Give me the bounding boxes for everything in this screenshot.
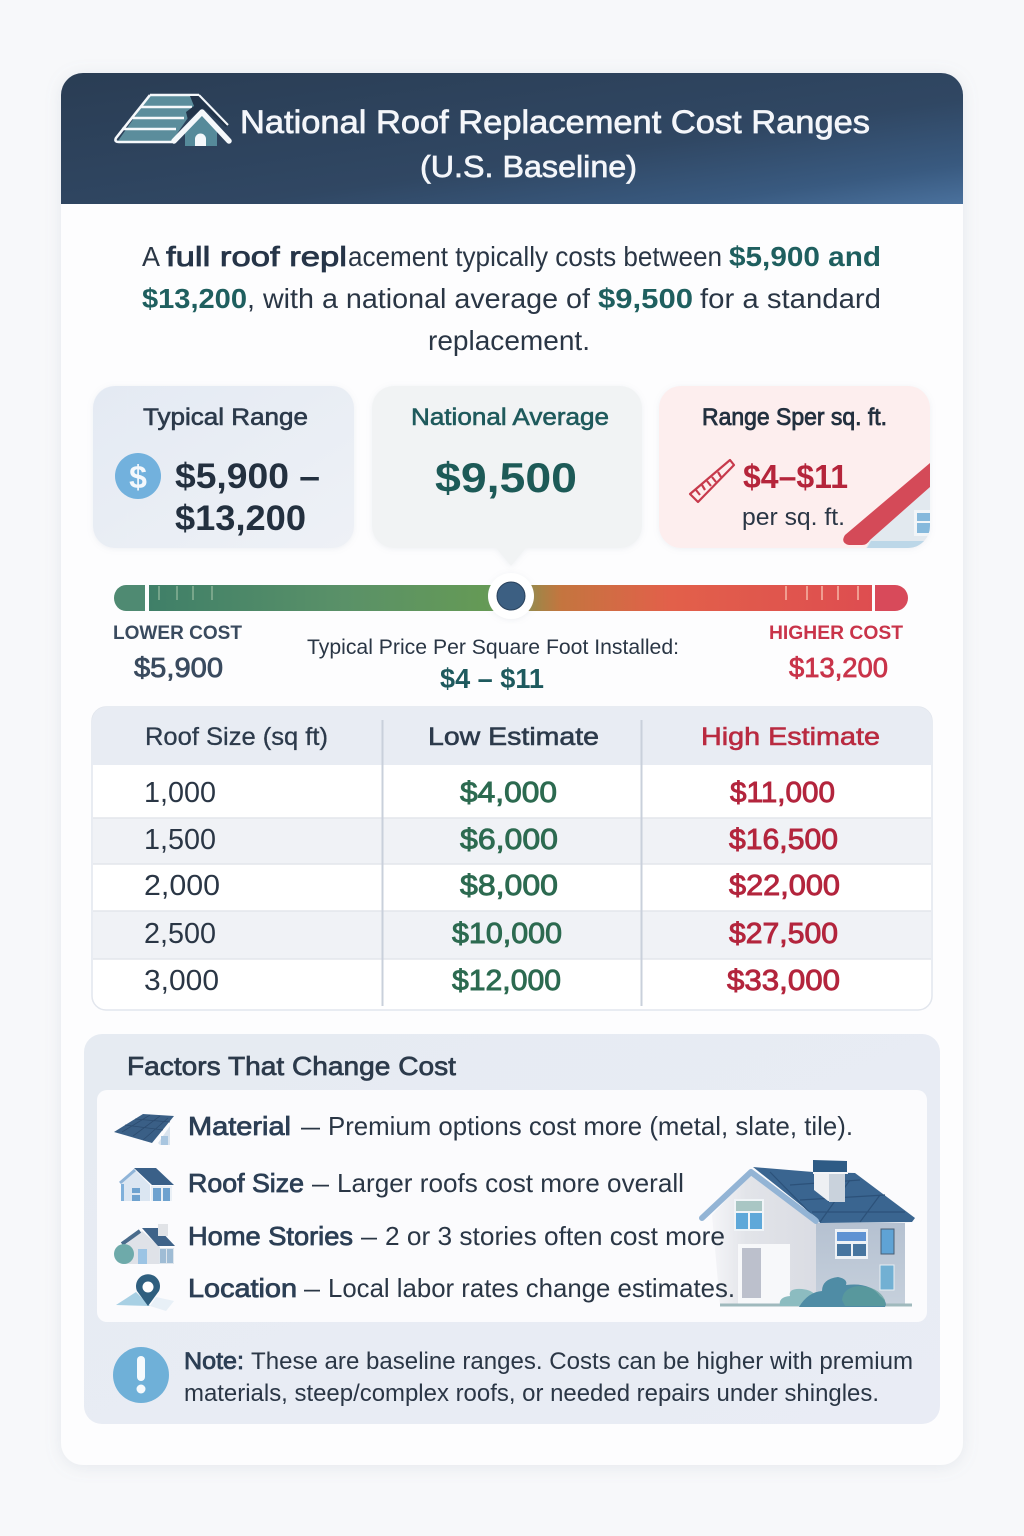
- table rows: 1,000: [144, 777, 216, 809]
- text: roof size: —: [312, 1168, 329, 1198]
- text: home stories: [188, 1221, 725, 1251]
- heading: range per sq ft: Range Sper sq. ft.: [702, 404, 887, 431]
- table rows: $12,000: [452, 965, 561, 997]
- heading: national average: National Average: [411, 404, 609, 431]
- text: note: These are baseline ranges. Costs can be higher with premium: [251, 1348, 913, 1375]
- label: typical price per square foot: [307, 636, 679, 694]
- table rows: $11,000: [730, 777, 835, 809]
- title: National Roof Replacement Cost Ranges: [240, 104, 870, 140]
- value: per sq ft: $4–$11: [743, 458, 848, 495]
- table header: [145, 723, 880, 751]
- factor: home stories: [114, 1221, 725, 1264]
- label: higher cost: $13,200: [789, 652, 888, 683]
- text: material: Premium options cost more (metal, slate, tile).: [328, 1111, 853, 1141]
- illustration: house: [702, 1160, 915, 1307]
- intro text: full roof repl: [166, 241, 347, 272]
- text: home stories: Home Stories: [188, 1221, 353, 1251]
- factor: location: [116, 1273, 735, 1311]
- illustration: roof corner: [843, 463, 932, 548]
- table rows: $8,000: [460, 870, 558, 902]
- value: typical range: $5,900 –: [175, 457, 320, 496]
- label: lower cost: $5,900: [134, 652, 223, 683]
- table rows: $16,500: [729, 824, 838, 856]
- value: typical range: $13,200: [175, 499, 306, 538]
- panel: factors that change cost: [84, 1034, 940, 1424]
- panel: national average: [372, 386, 642, 566]
- table rows: $4,000: [460, 777, 557, 809]
- text: note: [184, 1348, 913, 1407]
- panel: typical range: [93, 386, 354, 548]
- icon: solar roof: [114, 1114, 174, 1145]
- main card: [61, 73, 963, 1465]
- label: higher cost: HIGHER COST: [769, 623, 903, 644]
- icon: exclamation: [113, 1347, 169, 1403]
- label: lower cost: [113, 623, 242, 683]
- text: home stories: —: [361, 1221, 377, 1251]
- intro text: , with a national average of: [247, 283, 590, 314]
- table rows: 2,500: [144, 918, 216, 950]
- text: note: materials, steep/complex roofs, or needed repairs under shingles.: [184, 1380, 879, 1407]
- text: roof size: Roof Size: [188, 1168, 304, 1198]
- inner factors list panel: [97, 1090, 927, 1322]
- table header: Roof Size (sq ft): [145, 723, 328, 751]
- intro text: $5,900 and: [729, 241, 881, 272]
- note: [113, 1347, 913, 1407]
- intro text: [142, 241, 881, 356]
- icon: dollar coin: $: [129, 459, 147, 495]
- factor: material: [114, 1111, 853, 1145]
- text: location: —: [304, 1273, 320, 1303]
- factor: roof size: [120, 1168, 684, 1201]
- table header: Low Estimate: [428, 723, 599, 751]
- table rows: $6,000: [460, 824, 558, 856]
- value: national average: $9,500: [435, 454, 577, 501]
- table rows: 3,000: [144, 965, 219, 997]
- label: lower cost: LOWER COST: [113, 623, 242, 644]
- table rows: $27,500: [729, 918, 838, 950]
- text: roof size: [188, 1168, 684, 1198]
- table rows: $22,000: [729, 870, 840, 902]
- table rows: [144, 777, 840, 997]
- icon: roof and house: [115, 95, 229, 146]
- heading: factors: Factors That Change Cost: [127, 1051, 457, 1081]
- label: typical price per square foot: Typical Price Per Square Foot Installed:: [307, 636, 679, 659]
- value: typical range: [175, 457, 320, 538]
- label: typical price per square foot: $4 – $11: [440, 663, 544, 694]
- intro text: A: [142, 241, 160, 272]
- text: material: Material: [188, 1111, 291, 1141]
- table rows: 1,500: [144, 824, 216, 856]
- icon: dollar coin: [115, 453, 161, 499]
- icon: two-story house: [114, 1224, 175, 1264]
- text: location: Location: [188, 1273, 297, 1303]
- text: roof size: Larger roofs cost more overall: [337, 1168, 684, 1198]
- marker: national average: [488, 573, 534, 619]
- table rows: $10,000: [452, 918, 562, 950]
- table rows: $33,000: [727, 965, 840, 997]
- intro text: replacement.: [428, 325, 590, 356]
- label: higher cost: [769, 623, 903, 683]
- table header: High Estimate: [701, 723, 880, 751]
- table rows: 2,000: [144, 870, 220, 902]
- header band: [61, 73, 963, 204]
- text: location: Local labor rates change estimates.: [328, 1273, 735, 1303]
- text: material: —: [301, 1111, 320, 1141]
- text: home stories: 2 or 3 stories often cost more: [385, 1221, 725, 1251]
- title: [240, 104, 870, 184]
- panel: range per sq ft: [659, 386, 932, 548]
- unit label: per sq. ft.: [742, 504, 845, 531]
- intro text: for a standard: [700, 283, 881, 314]
- text: note: Note:: [184, 1348, 244, 1375]
- heading: typical range: Typical Range: [143, 404, 308, 431]
- intro text: $9,500: [598, 283, 693, 314]
- icon: small house: [120, 1168, 174, 1201]
- intro text: $13,200: [142, 283, 247, 314]
- cost table: [92, 707, 932, 1010]
- icon: ruler: [690, 460, 734, 502]
- icon: map pin: [116, 1274, 174, 1311]
- intro text: acement typically costs between: [348, 241, 722, 272]
- cost range bar: [114, 573, 908, 619]
- title: (U.S. Baseline): [420, 149, 637, 184]
